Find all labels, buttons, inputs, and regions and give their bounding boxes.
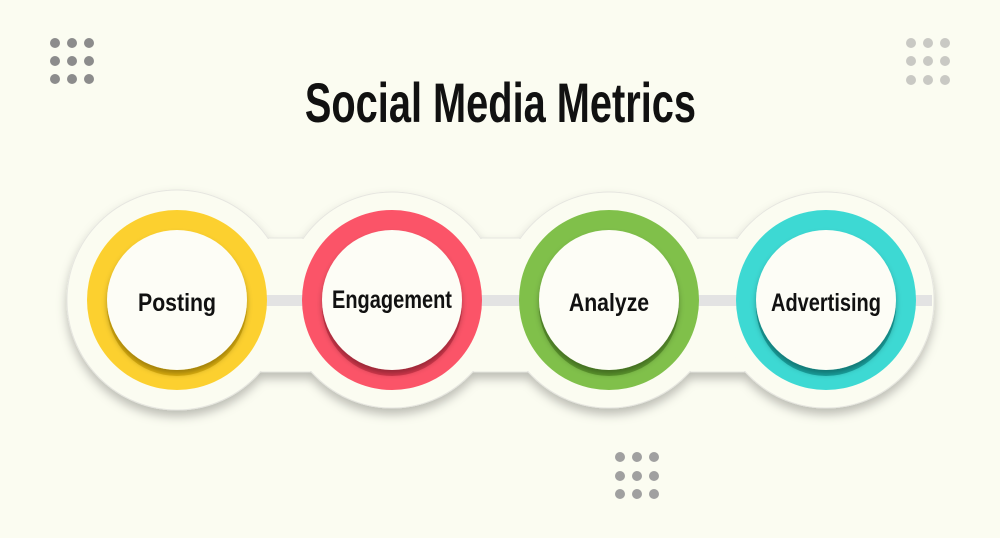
dots: bottom xyxy=(615,452,659,499)
connector line xyxy=(177,295,932,306)
dots: top-left xyxy=(50,38,94,84)
step: Posting: Posting xyxy=(138,288,216,316)
dots: top-right xyxy=(906,38,950,85)
step: Engagement: Engagement xyxy=(332,286,452,314)
step: Advertising xyxy=(736,210,916,390)
step: Engagement xyxy=(302,210,482,390)
step: Analyze xyxy=(519,210,699,390)
title: Social Media Metrics xyxy=(304,71,696,134)
white blob background xyxy=(67,190,934,410)
step: Advertising: Advertising xyxy=(771,289,881,317)
step: Analyze: Analyze xyxy=(569,288,649,316)
step: Posting xyxy=(87,210,267,390)
